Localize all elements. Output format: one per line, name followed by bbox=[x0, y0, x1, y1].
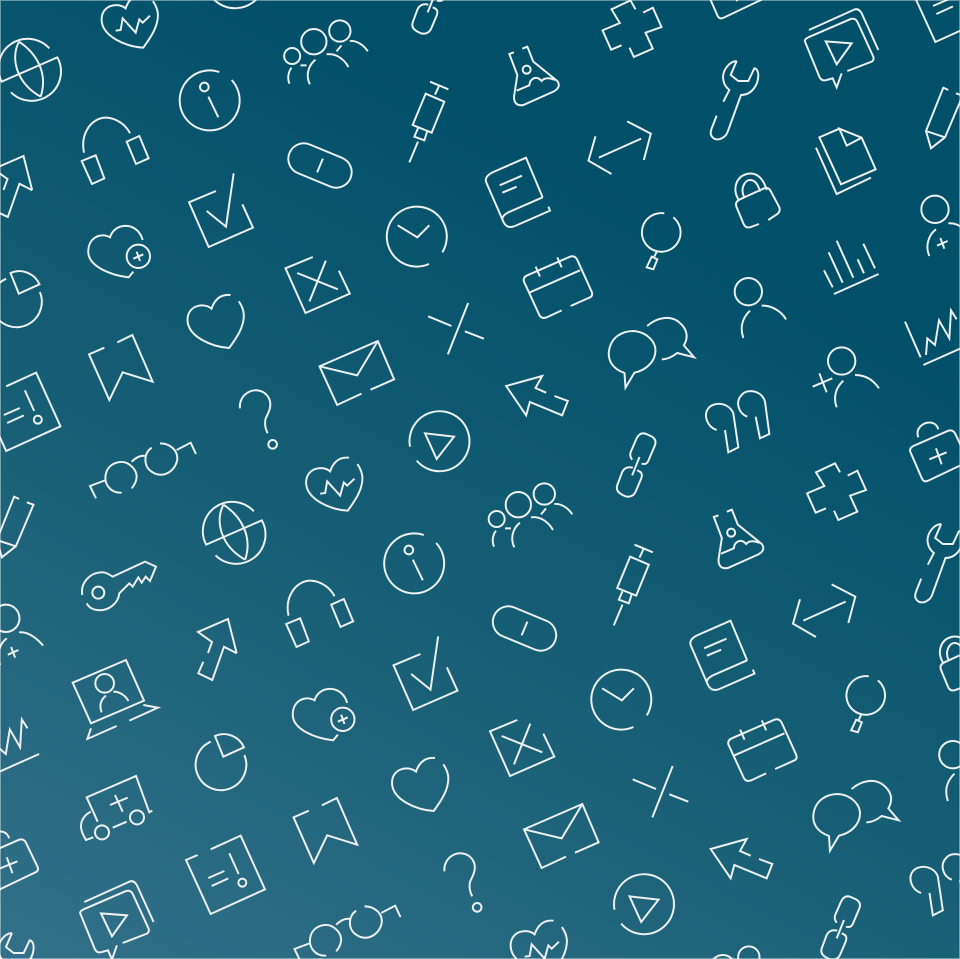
icon: ambulance bbox=[81, 776, 152, 840]
icon: first aid kit bbox=[706, 0, 763, 18]
icon: crossed lines bbox=[633, 766, 688, 817]
icon: line chart bbox=[905, 310, 960, 365]
icon: question mark bbox=[444, 853, 481, 912]
icon: play circle bbox=[614, 874, 674, 934]
icon: pill bbox=[488, 602, 561, 655]
icon: heart with pulse bbox=[511, 921, 567, 959]
icon: play circle bbox=[205, 0, 265, 8]
icon: syringe bbox=[614, 545, 653, 625]
icon: chain link bbox=[821, 896, 860, 959]
icon: heart plus bbox=[88, 226, 150, 277]
icon: x box bbox=[285, 257, 350, 313]
icon: speech bubbles bbox=[813, 781, 899, 851]
icon: person bbox=[939, 741, 960, 801]
icon: bookmark bbox=[293, 798, 357, 863]
icon: up arrow bbox=[0, 156, 32, 217]
icon: clock bbox=[591, 670, 651, 730]
icon: crossed lines bbox=[428, 303, 484, 354]
icon: double arrow bbox=[588, 121, 651, 174]
icon: chain link bbox=[617, 433, 655, 497]
icon: first aid kit bbox=[910, 423, 960, 481]
icon: wrench bbox=[0, 933, 34, 959]
icon: heart with pulse bbox=[306, 458, 362, 511]
icon: left arrow bbox=[506, 376, 568, 415]
icon: book bbox=[690, 621, 754, 690]
icon: heart with pulse bbox=[102, 0, 158, 48]
icon: info bbox=[384, 533, 444, 593]
icon: key bbox=[82, 562, 156, 610]
icon: heart bbox=[187, 295, 244, 348]
icon: play circle bbox=[409, 411, 469, 471]
icon: up arrow bbox=[198, 619, 237, 680]
icon: wrench bbox=[711, 61, 758, 139]
icon: bar chart bbox=[824, 241, 879, 294]
icon: alert note bbox=[0, 373, 60, 451]
icon: magnifier bbox=[846, 676, 885, 732]
icon: pie chart bbox=[0, 271, 42, 327]
icon: glasses bbox=[90, 443, 196, 498]
icon: glasses bbox=[294, 906, 400, 959]
icon: clock bbox=[387, 207, 447, 267]
icon: left arrow bbox=[711, 839, 772, 878]
icon: book bbox=[486, 158, 550, 227]
icon: wrench bbox=[915, 524, 960, 602]
icon: question mark bbox=[240, 390, 277, 449]
icon: envelope bbox=[524, 804, 599, 868]
icon: people group bbox=[284, 20, 368, 84]
icon: documents bbox=[816, 129, 876, 194]
icon: pill bbox=[284, 139, 356, 192]
icon: pen bbox=[926, 88, 960, 148]
icon: person with plus bbox=[0, 605, 43, 665]
icon: video message bbox=[80, 881, 154, 959]
icon: add person bbox=[813, 347, 879, 407]
icon: headphones bbox=[286, 581, 353, 647]
icon: person bbox=[735, 278, 786, 338]
icon: pie chart bbox=[196, 734, 246, 790]
icon: globe bbox=[203, 502, 265, 564]
icon: double arrow bbox=[793, 584, 855, 637]
icon: padlock bbox=[735, 174, 780, 227]
icon: medical cross bbox=[807, 463, 866, 520]
icon: syringe bbox=[409, 82, 448, 162]
icon: laptop with person bbox=[73, 660, 158, 739]
icon: padlock bbox=[940, 637, 960, 690]
icon: alert note bbox=[911, 0, 960, 42]
icon: bookmark bbox=[89, 335, 153, 400]
icon: medical cross bbox=[602, 0, 661, 57]
icon: pen bbox=[0, 497, 33, 557]
icon: checkbox bbox=[189, 173, 253, 247]
icon: alert note bbox=[186, 836, 265, 914]
icon: people group bbox=[693, 946, 777, 959]
icon: heart plus bbox=[293, 689, 354, 740]
icon: flask bbox=[509, 47, 559, 105]
icon: x box bbox=[490, 720, 554, 776]
icon: people group bbox=[489, 483, 572, 547]
icon: globe bbox=[0, 39, 61, 101]
icon: earbuds bbox=[706, 391, 769, 452]
icon: calendar bbox=[728, 719, 797, 781]
icon: flask bbox=[714, 510, 763, 568]
icon: magnifier bbox=[642, 213, 681, 269]
icon: calendar bbox=[524, 256, 592, 318]
icon: envelope bbox=[319, 341, 394, 405]
icon: speech bubbles bbox=[609, 318, 694, 388]
icon: earbuds bbox=[911, 854, 960, 915]
icon: line chart bbox=[0, 719, 39, 774]
icon: video message bbox=[805, 9, 878, 87]
icon: person with plus bbox=[921, 196, 960, 256]
icon: heart bbox=[392, 758, 448, 811]
icon: first aid kit bbox=[0, 832, 38, 890]
icon: checkbox bbox=[393, 636, 457, 710]
icon: info bbox=[180, 70, 240, 130]
icon: headphones bbox=[82, 118, 149, 184]
icon: chain link bbox=[412, 0, 451, 34]
